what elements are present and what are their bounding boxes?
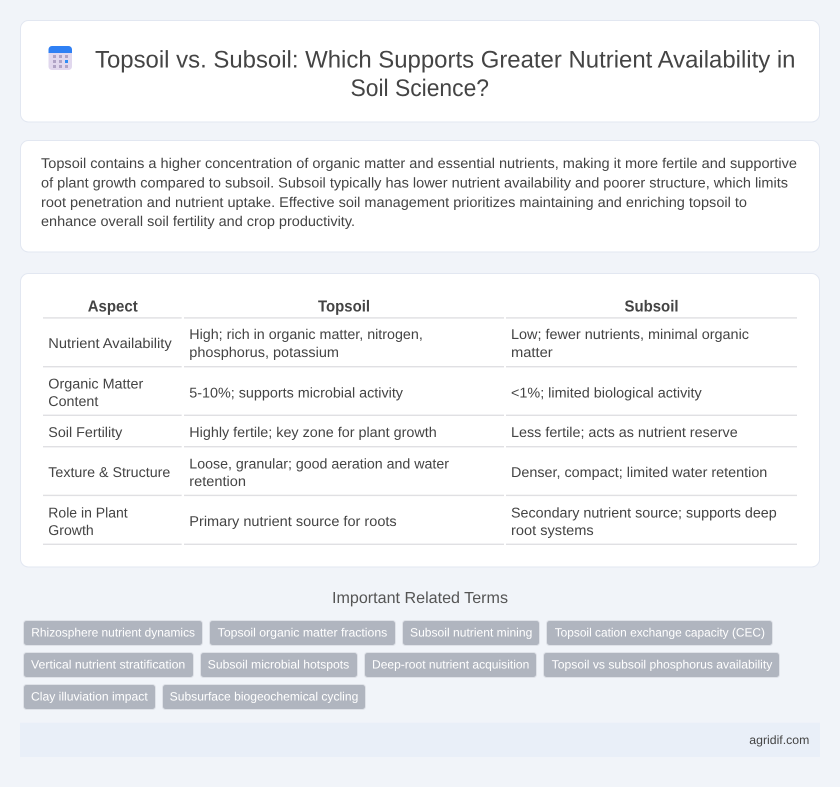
text block: introduction paragraph: root penetration and nutrient uptake. Effective soil management prioritizes maintaining and enriching topsoil to	[41, 195, 747, 211]
table row: texture and structure: Texture & Structure	[48, 465, 170, 481]
text block: introduction paragraph	[41, 156, 797, 230]
table row: nutrient availability: High; rich in organic matter, nitrogen,	[189, 327, 423, 343]
footer bar	[20, 723, 820, 757]
table row: organic matter content: Organic Matter	[48, 376, 144, 392]
table row: nutrient availability: Low; fewer nutrients, minimal organic	[511, 327, 749, 343]
table row: soil fertility: Highly fertile; key zone for plant growth	[189, 425, 437, 441]
tag list: related terms: Topsoil cation exchange capacity (CEC)	[555, 626, 765, 640]
table header row: Topsoil	[318, 299, 370, 316]
title	[95, 46, 796, 102]
table row: organic matter content: 5-10%; supports microbial activity	[189, 385, 404, 401]
panel: introduction	[20, 140, 820, 252]
footer bar: agridif.com	[749, 733, 809, 747]
tag list: related terms: Clay illuviation impact	[31, 690, 148, 704]
tag list: related terms: Rhizosphere nutrient dynamics	[31, 626, 195, 640]
table row: nutrient availability: matter	[511, 345, 553, 361]
table row: role in plant growth: Role in Plant	[48, 505, 128, 521]
table header row: Subsoil	[624, 299, 678, 316]
tag list: related terms: Subsurface biogeochemical cycling	[170, 690, 358, 704]
text block: introduction paragraph: Topsoil contains a higher concentration of organic matter and essential nutrients, making it more fertile and supportive	[41, 156, 797, 172]
table row: role in plant growth: Secondary nutrient source; supports deep	[511, 505, 777, 521]
table row: role in plant growth: Growth	[48, 523, 94, 539]
table row: nutrient availability: phosphorus, potassium	[189, 345, 339, 361]
table row: nutrient availability: Nutrient Availability	[48, 336, 173, 352]
table row: role in plant growth	[48, 505, 777, 539]
table row: texture and structure: Denser, compact; limited water retention	[511, 465, 767, 481]
tag list: related terms: Subsoil nutrient mining	[410, 626, 532, 640]
table header row	[88, 299, 678, 316]
table row: texture and structure	[48, 456, 767, 490]
tag list: related terms: Topsoil organic matter fractions	[218, 626, 387, 640]
table row: texture and structure: retention	[189, 474, 246, 490]
text block: introduction paragraph: enhance overall soil fertility and crop productivity.	[41, 214, 355, 230]
table row: role in plant growth: Primary nutrient source for roots	[189, 514, 397, 530]
table row: soil fertility: Less fertile; acts as nutrient reserve	[511, 425, 738, 441]
tag list: related terms: Topsoil vs subsoil phosphorus availability	[552, 658, 772, 672]
icon: calendar	[48, 46, 72, 70]
table row: role in plant growth: root systems	[511, 523, 594, 539]
heading: important related terms: Important Related Terms	[332, 590, 508, 607]
table row: soil fertility: Soil Fertility	[48, 425, 123, 441]
table row: organic matter content: <1%; limited biological activity	[511, 385, 703, 401]
text block: introduction paragraph: of plant growth compared to subsoil. Subsoil typically has lower nutrient availability and poorer structure, which limits	[41, 175, 788, 191]
table header row: Aspect	[88, 299, 138, 316]
table rules	[43, 317, 797, 545]
tag list: related terms	[24, 620, 780, 710]
title: Soil Science?	[350, 75, 489, 102]
tag list: related terms: Deep-root nutrient acquisition	[372, 658, 529, 672]
tag list: related terms: Vertical nutrient stratification	[31, 658, 185, 672]
table row: nutrient availability	[48, 327, 749, 361]
table row: soil fertility	[48, 425, 738, 441]
tag list: related terms: Subsoil microbial hotspots	[208, 658, 349, 672]
table row: texture and structure: Loose, granular; good aeration and water	[189, 456, 449, 472]
title: Topsoil vs. Subsoil: Which Supports Greater Nutrient Availability in	[95, 46, 796, 74]
panel: title header	[20, 20, 820, 122]
panel: comparison table	[20, 274, 820, 567]
table row: organic matter content: Content	[48, 394, 98, 410]
table row: organic matter content	[48, 376, 703, 410]
